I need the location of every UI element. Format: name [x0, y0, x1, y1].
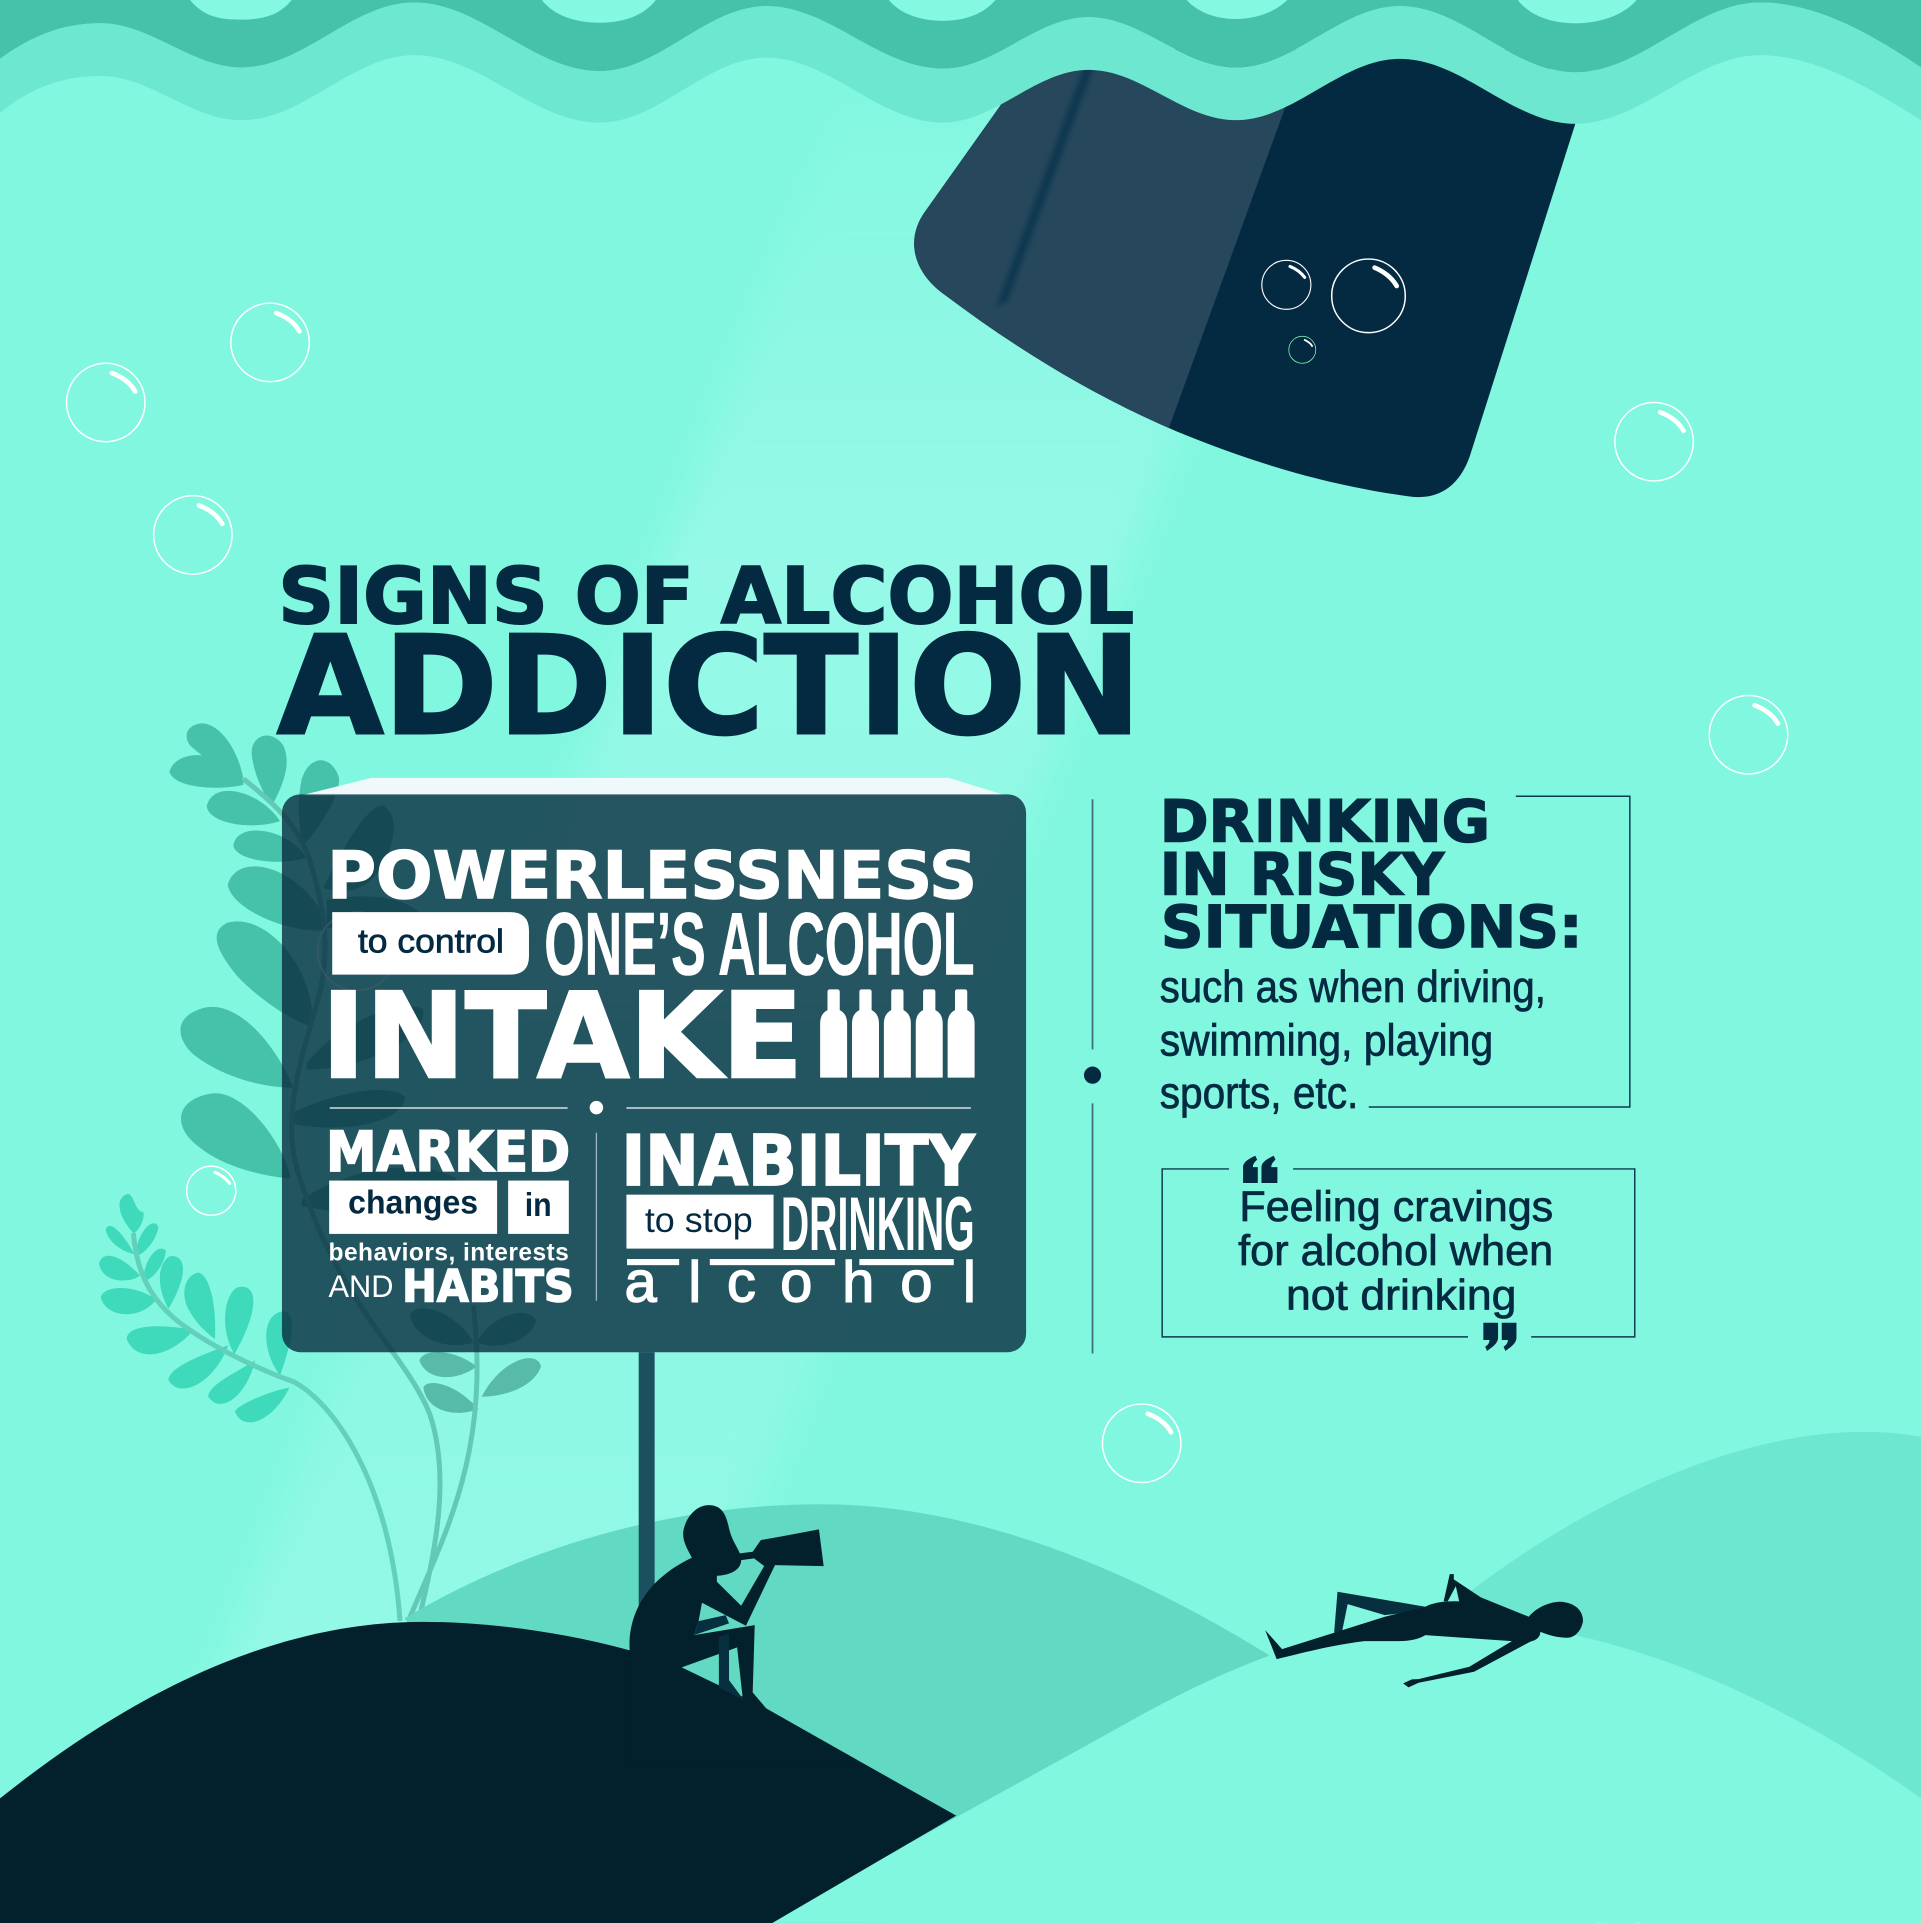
light beam — [123, 110, 1303, 1922]
quote text — [1238, 1183, 1553, 1319]
timeline divider — [1084, 799, 1101, 1353]
heading: risky situations: SITUATIONS: — [1161, 894, 1583, 961]
body text: examples: such as when driving, — [1160, 963, 1546, 1012]
text: drinking: DRINKING — [781, 1182, 975, 1267]
text: and: AND — [329, 1268, 394, 1304]
sign panel — [282, 794, 1026, 1352]
bubble behind sign — [318, 912, 396, 991]
panel: cravings quote — [1162, 1156, 1635, 1351]
plant: small stem and leaves — [99, 1194, 400, 1621]
text: inability: INABILITY — [622, 1121, 976, 1202]
floating body — [1265, 1574, 1583, 1687]
text: intake: INTAKE — [321, 968, 803, 1105]
box: changes — [329, 1181, 497, 1234]
icon: five bottles — [820, 989, 975, 1078]
quote text: for alcohol when — [1238, 1227, 1553, 1275]
box: to stop — [626, 1195, 774, 1249]
figure: man drinking on the hill — [629, 1505, 857, 1760]
pill: to control: to control — [358, 924, 504, 961]
heading: risky situations: DRINKING — [1160, 789, 1490, 856]
heading: risky situations: IN RISKY — [1160, 841, 1445, 908]
box: to stop: to stop — [645, 1200, 753, 1240]
plant: large stem and leaves — [169, 723, 541, 1621]
title: SIGNS OF ALCOHOL — [278, 552, 1134, 642]
bent leg — [1334, 1592, 1429, 1633]
middle hill — [405, 1504, 1349, 1922]
sign board — [282, 778, 1026, 1352]
box: in: in — [525, 1187, 552, 1224]
text: marked: MARKED — [326, 1121, 570, 1185]
sign top edge — [300, 778, 1006, 796]
dark foreground hill — [0, 1622, 956, 1923]
body, head and bottle silhouette — [629, 1505, 857, 1760]
quote text: not drinking — [1286, 1271, 1516, 1319]
bubbles — [67, 259, 1788, 1923]
heading: risky situations — [1160, 789, 1583, 961]
box: in — [508, 1181, 569, 1234]
text: habits: HABITS — [402, 1261, 574, 1312]
waves — [0, 0, 1921, 124]
icon: opening quote — [1243, 1156, 1277, 1183]
body text: examples: sports, etc. — [1160, 1069, 1358, 1118]
dark surface shape — [858, 49, 1575, 497]
sign post — [639, 1352, 655, 1640]
text: alcohol: alcohol — [625, 1250, 976, 1314]
far leg — [694, 1615, 744, 1700]
front hill — [772, 1621, 1921, 1923]
heading: powerlessness: POWERLESSNESS — [327, 839, 977, 914]
pill: to control — [332, 912, 529, 975]
figure: man floating on the hill — [1265, 1574, 1583, 1687]
panel: drinking in risky situations — [1160, 789, 1630, 1118]
title: ADDICTION — [277, 608, 1141, 766]
text: behaviors, interests: behaviors, interests — [329, 1239, 569, 1266]
text: one's alcohol: ONE’S ALCOHOL — [544, 894, 975, 994]
body text: examples — [1160, 963, 1546, 1118]
quote text: Feeling cravings — [1239, 1183, 1553, 1231]
box: changes: changes — [348, 1185, 478, 1222]
body text: examples: swimming, playing — [1160, 1017, 1493, 1066]
back hill right — [1459, 1432, 1921, 1922]
icon: closing quote — [1483, 1323, 1516, 1351]
